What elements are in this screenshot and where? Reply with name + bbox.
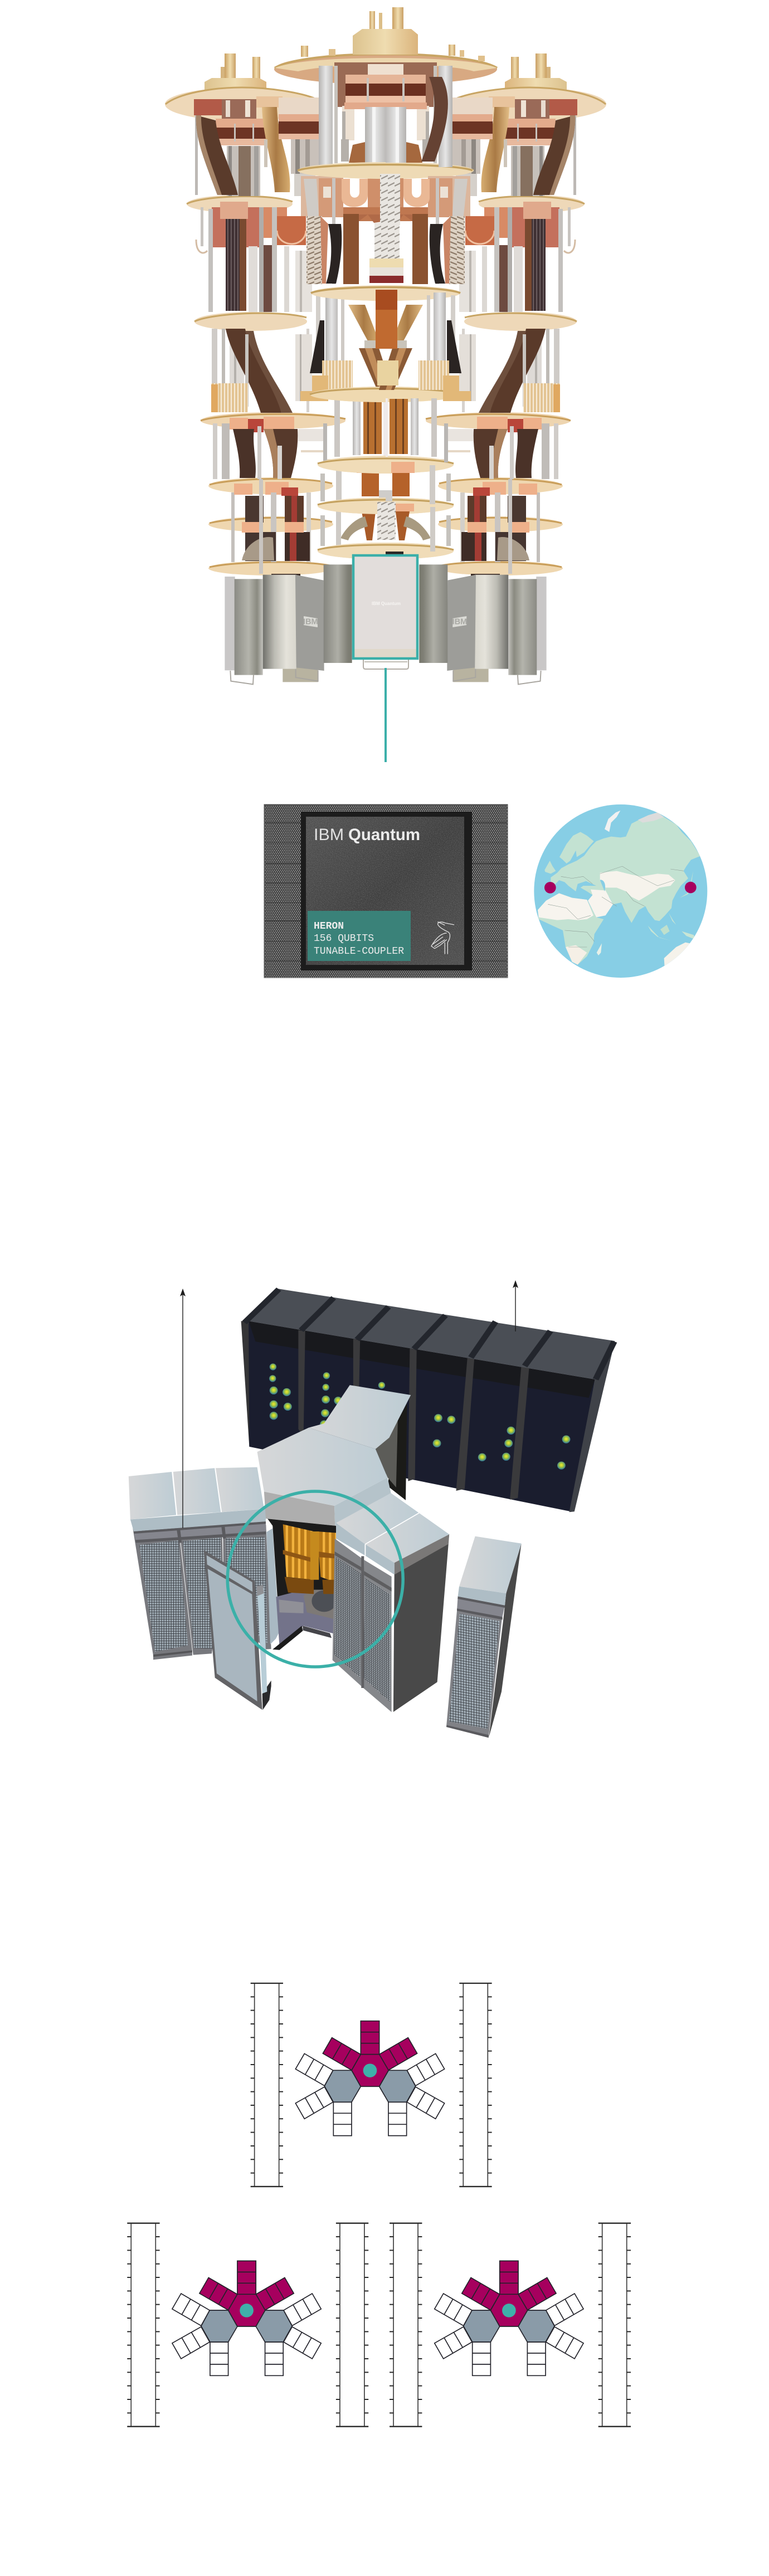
teal spec box: 156 QUBITS xyxy=(314,933,374,944)
teal highlight ring xyxy=(227,1491,403,1667)
silver cryostat cans xyxy=(225,564,547,684)
teal spec box xyxy=(308,911,411,961)
chip brand xyxy=(314,826,420,844)
marker: west xyxy=(544,882,556,894)
arrow: left xyxy=(180,1289,186,1528)
arrow: right xyxy=(513,1280,518,1331)
teal leader line xyxy=(384,668,387,762)
tier 1 xyxy=(334,62,386,107)
data center system xyxy=(129,1280,615,1738)
right rack front xyxy=(333,1539,392,1712)
central column stack xyxy=(298,62,474,559)
die xyxy=(301,812,472,970)
tier 4 xyxy=(353,398,361,455)
server row xyxy=(241,1289,615,1512)
tier E xyxy=(231,492,235,562)
teal spec box: TUNABLE-COUPLER xyxy=(314,946,404,957)
highlighted chip can with teal frame xyxy=(353,555,418,669)
lower left processor unit xyxy=(127,2223,368,2427)
icon: heron bird xyxy=(431,922,454,954)
Heron chip xyxy=(264,804,508,978)
IBM badge right: IBM xyxy=(452,618,467,627)
IBM badge left: IBM xyxy=(303,618,318,627)
detached rack xyxy=(446,1536,522,1738)
tier D xyxy=(213,423,217,479)
left mesh panels xyxy=(133,1525,279,1660)
hexagon modules xyxy=(295,2021,445,2136)
tier C xyxy=(212,329,217,412)
tier F xyxy=(245,532,276,561)
plates xyxy=(187,195,293,213)
left rack roofs xyxy=(130,1509,266,1531)
tier 5 xyxy=(336,465,342,504)
open door xyxy=(204,1550,271,1710)
tier 2 xyxy=(301,176,343,216)
central column top plate and hub xyxy=(274,7,497,85)
tier B xyxy=(212,207,262,247)
right tick rail xyxy=(459,1983,492,2187)
plates xyxy=(298,162,474,179)
globe map xyxy=(534,804,707,978)
status LEDs xyxy=(269,1363,570,1470)
floor xyxy=(276,1590,334,1647)
chip lattice background xyxy=(264,804,508,978)
teal spec box: HERON xyxy=(314,921,344,932)
marker: east xyxy=(685,882,697,893)
tier 3 xyxy=(348,305,379,341)
hub roof xyxy=(264,1492,335,1526)
golden cryostat xyxy=(283,1524,336,1594)
highlighted chip can with teal frame: IBM Quantum xyxy=(372,601,401,606)
qubit dot xyxy=(363,2063,377,2077)
chip brand: Quantum xyxy=(348,826,420,844)
outer tower half: left, with mirrored right copy xyxy=(165,53,606,582)
infographic canvas xyxy=(127,7,708,2427)
tier 6 xyxy=(357,504,377,511)
right rack top and side xyxy=(172,1468,449,1712)
cryostat chandelier xyxy=(165,7,606,762)
lower right processor unit xyxy=(390,2223,631,2427)
left tick rail xyxy=(251,1983,283,2187)
processor layout diagram: single unit xyxy=(251,1983,492,2187)
tier A xyxy=(195,111,198,195)
chip brand: IBM xyxy=(314,826,344,844)
core interior: cryostat niche xyxy=(129,1385,411,1650)
